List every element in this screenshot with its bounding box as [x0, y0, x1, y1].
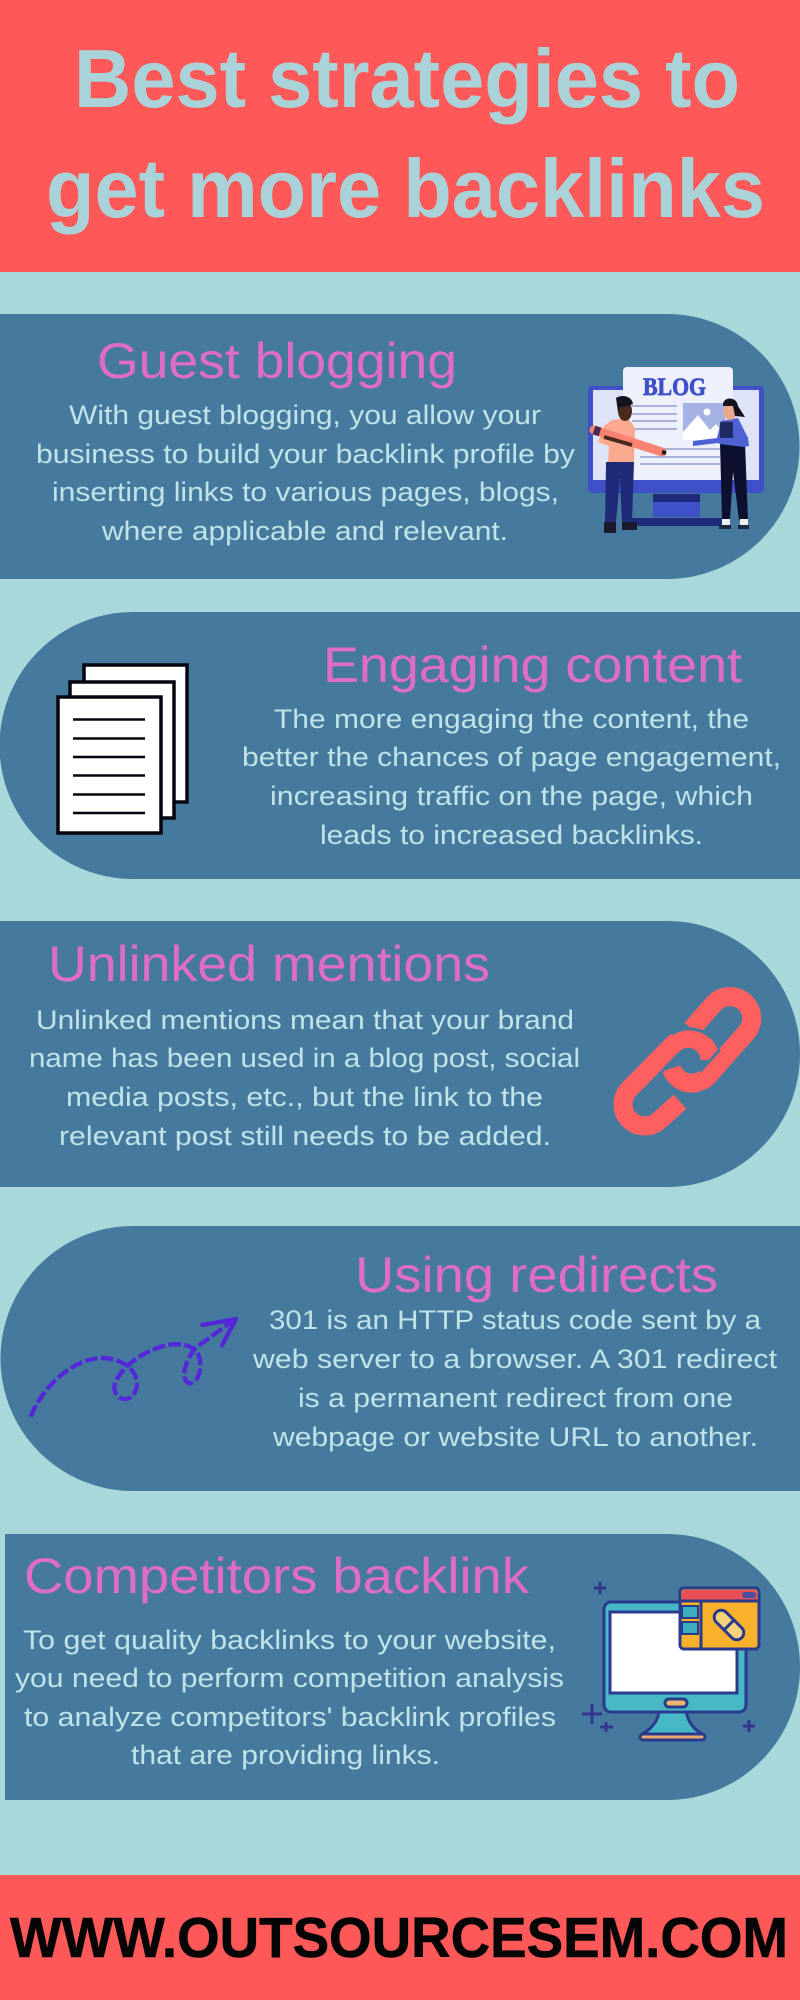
panel: engaging content	[0, 612, 800, 879]
text: competitors backlink: to analyze competitors' backlink profiles	[24, 1702, 556, 1732]
text: competitors backlink: you need to perform competition analysis	[15, 1663, 564, 1693]
panel: unlinked mentions	[0, 921, 800, 1187]
icon: chain link	[623, 997, 752, 1126]
text: using redirects	[252, 1305, 778, 1452]
text: using redirects: is a permanent redirect from one	[298, 1383, 733, 1413]
text: guest blogging: inserting links to various pages, blogs,	[52, 477, 559, 507]
text: competitors backlink: that are providing links.	[131, 1740, 440, 1770]
footer banner	[0, 1875, 800, 2000]
heading: engaging content: Engaging content	[323, 637, 742, 693]
text: engaging content: The more engaging the content, the	[274, 704, 749, 734]
text: using redirects: 301 is an HTTP status code sent by a	[269, 1305, 762, 1335]
title: Best strategies to	[74, 32, 740, 125]
title	[46, 32, 765, 235]
text: using redirects: web server to a browser. A 301 redirect	[252, 1344, 778, 1374]
text: engaging content: increasing traffic on the page, which	[270, 781, 753, 811]
heading: using redirects: Using redirects	[355, 1247, 718, 1303]
icon: blog monitor with two people	[588, 367, 764, 533]
footer url: WWW.OUTSOURCESEM.COM	[10, 1906, 788, 1970]
text: engaging content: leads to increased backlinks.	[320, 820, 703, 850]
text: competitors backlink	[15, 1625, 564, 1770]
text: unlinked mentions: name has been used in a blog post, social	[29, 1043, 580, 1073]
text: guest blogging: where applicable and relevant.	[101, 516, 508, 546]
icon: computer with link window	[582, 1582, 759, 1740]
panel: competitors backlink	[5, 1534, 800, 1800]
header banner	[0, 0, 800, 272]
text: unlinked mentions: media posts, etc., but the link to the	[66, 1082, 543, 1112]
text: competitors backlink: To get quality backlinks to your website,	[23, 1625, 556, 1655]
text: unlinked mentions: Unlinked mentions mean that your brand	[36, 1005, 574, 1035]
text: using redirects: webpage or website URL to another.	[272, 1422, 758, 1452]
text: engaging content: better the chances of page engagement,	[242, 742, 781, 772]
text: guest blogging: business to build your backlink profile by	[36, 439, 576, 469]
panel: guest blogging	[0, 314, 800, 579]
panel: using redirects	[0, 1226, 800, 1491]
woman	[720, 443, 748, 520]
heading: competitors backlink: Competitors backlink	[24, 1548, 530, 1604]
heading: guest blogging: Guest blogging	[97, 333, 457, 389]
heading: unlinked mentions: Unlinked mentions	[48, 936, 490, 992]
title: get more backlinks	[46, 142, 765, 235]
text: guest blogging	[36, 400, 576, 546]
text: engaging content	[242, 704, 781, 850]
icon: blog monitor with two people: BLOG	[643, 374, 706, 401]
man	[605, 462, 634, 522]
text: unlinked mentions: relevant post still needs to be added.	[59, 1121, 551, 1151]
icon: stacked documents	[58, 665, 187, 833]
text: unlinked mentions	[29, 1005, 580, 1151]
text: guest blogging: With guest blogging, you allow your	[69, 400, 541, 430]
icon: looping dashed arrow	[31, 1319, 236, 1417]
